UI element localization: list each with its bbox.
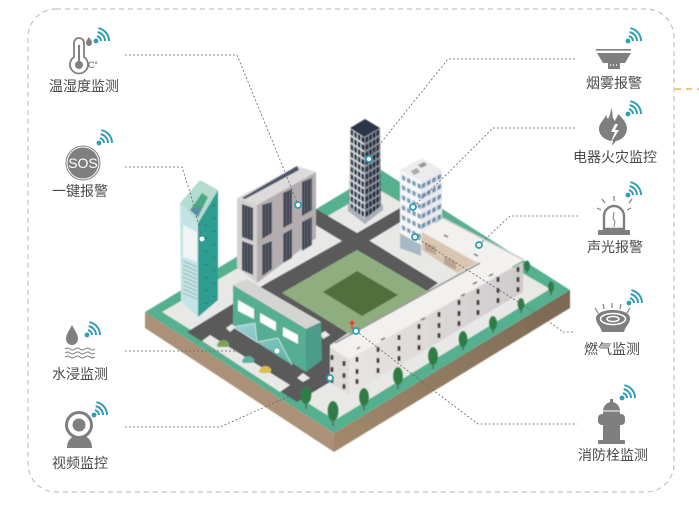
trees	[300, 260, 554, 426]
label: water immersion: 水浸监测	[52, 366, 108, 382]
icon: siren	[597, 182, 641, 235]
icon: SOS button	[66, 130, 112, 180]
icon: smoke detector	[596, 28, 641, 69]
L-shaped long building	[330, 218, 524, 395]
icon: gas burner	[595, 290, 642, 332]
icon: thermometer	[70, 28, 109, 73]
label: hydrant monitoring: 消防栓监测	[578, 447, 648, 463]
icon: fire hydrant	[598, 385, 635, 444]
road network	[187, 208, 438, 402]
label: temperature humidity: 温湿度监测	[49, 78, 119, 94]
label: sound and light alarm: 声光报警	[587, 239, 643, 255]
label: video monitoring: 视频监控	[52, 455, 108, 471]
icon: thermometer: C°	[88, 60, 98, 70]
parked cars	[217, 340, 271, 373]
leader lines	[125, 55, 578, 427]
grey office building	[237, 166, 316, 283]
icon: SOS button: SOS	[68, 155, 98, 171]
platform base	[145, 170, 570, 452]
white tower	[400, 158, 442, 256]
isometric campus	[145, 119, 570, 452]
central lawn	[282, 250, 427, 335]
black high-rise	[348, 119, 383, 224]
icon: camera	[66, 402, 107, 448]
orange connector stub	[675, 88, 699, 90]
red fire hydrant marker	[349, 320, 355, 329]
teal glass tower	[180, 180, 218, 317]
label: one-touch alarm: 一键报警	[52, 183, 108, 199]
sensor markers	[200, 156, 482, 381]
label: electrical fire monitoring: 电器火灾监控	[573, 149, 657, 165]
icon: water leak	[65, 322, 100, 358]
label: gas monitoring: 燃气监测	[584, 341, 640, 357]
icon: electrical fire	[599, 101, 641, 146]
teal low building with parking	[233, 279, 322, 372]
label: smoke alarm: 烟雾报警	[586, 75, 642, 91]
